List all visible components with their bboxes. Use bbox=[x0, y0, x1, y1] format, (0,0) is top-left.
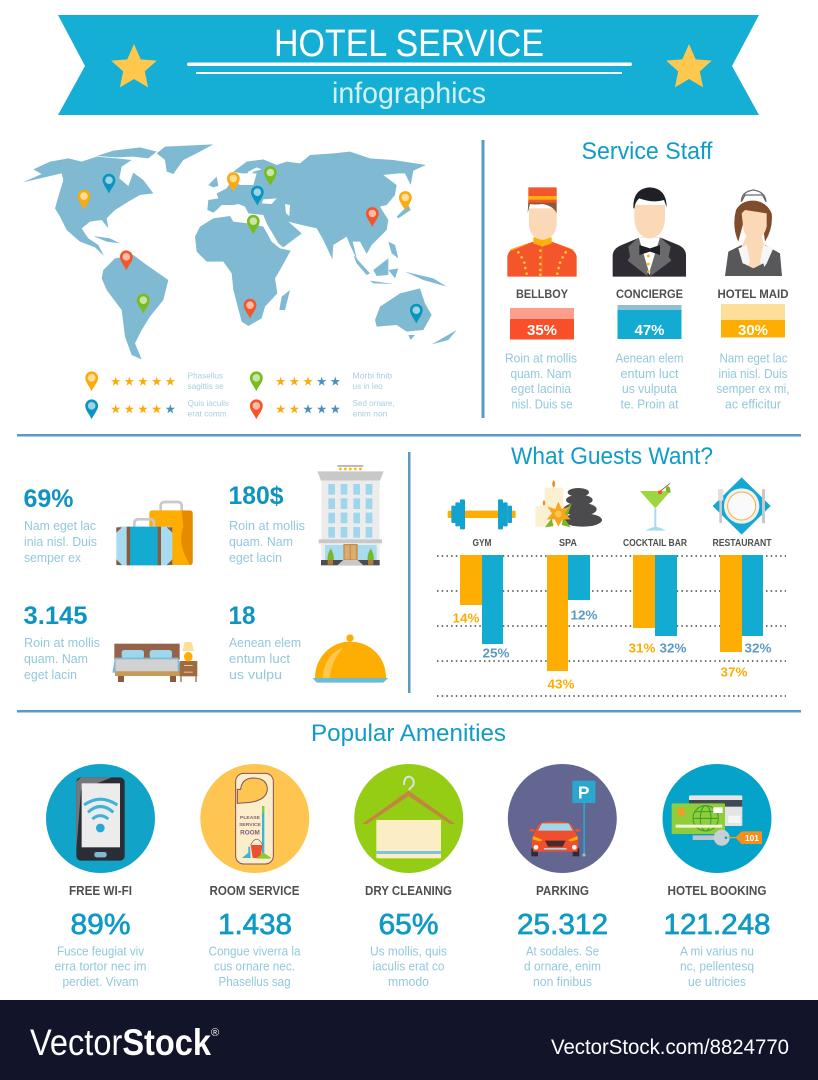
amenity: wifi labels: Fusce feugiat viv bbox=[57, 944, 145, 958]
bar chart: 43% bbox=[548, 678, 574, 692]
amenity: wifi labels: erra tortor nec im bbox=[54, 960, 146, 974]
icon: bellboy bbox=[507, 187, 577, 277]
footer bar bbox=[0, 1000, 818, 1080]
stat: 3.145: 3.145 bbox=[24, 602, 88, 630]
icon: cloche bbox=[313, 634, 388, 683]
amenity: wifi labels bbox=[54, 884, 146, 989]
stat: 69%: inia nisl. Duis bbox=[24, 535, 97, 549]
icon: cocktail bbox=[640, 483, 671, 531]
map legend: erat comm bbox=[188, 409, 227, 419]
icon: parking: P bbox=[578, 782, 589, 802]
icon: hotel building bbox=[317, 465, 384, 565]
stat: 180$: Roin at mollis bbox=[229, 519, 305, 533]
map legend: Sed ornare, bbox=[353, 398, 395, 408]
stat: 180$: quam. Nam bbox=[229, 535, 293, 549]
heading: What Guests Want?: What Guests Want? bbox=[511, 443, 713, 470]
bar: maid 30% bbox=[721, 304, 785, 339]
panel: what guests want bbox=[437, 443, 786, 696]
stat: 3.145: eget lacin bbox=[24, 668, 77, 682]
amenity: dry cleaning labels: Us mollis, quis bbox=[370, 944, 447, 958]
icon: door hanger bbox=[200, 764, 309, 873]
amenity: dry cleaning labels: iaculis erat co bbox=[372, 960, 445, 974]
label: gym: GYM bbox=[472, 538, 492, 549]
icon: dumbbell bbox=[448, 499, 516, 529]
stat: 18: entum luct bbox=[229, 652, 291, 666]
icon: parking bbox=[508, 764, 617, 873]
staff: maid label: HOTEL MAID bbox=[718, 289, 788, 301]
icon: suitcases bbox=[116, 502, 193, 565]
bar chart: 32% bbox=[744, 642, 772, 656]
stat: 3.145: quam. Nam bbox=[24, 652, 88, 666]
amenity: room service labels: cus ornare nec. bbox=[214, 960, 295, 974]
icon: door hanger: PLEASE bbox=[240, 815, 261, 821]
label: cocktail bar: COCKTAIL BAR bbox=[623, 538, 688, 549]
panel: popular amenities bbox=[46, 720, 772, 989]
text: bellboy: quam. Nam bbox=[510, 367, 572, 381]
amenity: room service labels: Phasellus sag bbox=[218, 975, 291, 989]
map legend: enim non bbox=[353, 409, 388, 419]
footer url: VectorStock.com/8824770 bbox=[551, 1036, 789, 1059]
icon: door hanger: ROOM bbox=[240, 830, 260, 837]
text: concierge: Aenean elem bbox=[616, 352, 684, 366]
amenity: hotel booking labels: nc, pellentesq bbox=[680, 960, 754, 974]
text: bellboy: Roin at mollis bbox=[505, 352, 577, 366]
amenity: room service labels: Congue viverra la bbox=[208, 944, 301, 958]
icon: door hanger: SERVICE bbox=[239, 822, 262, 828]
bar chart: 31% bbox=[628, 642, 656, 656]
text: maid: semper ex mi, bbox=[716, 382, 790, 396]
map legend: Morbi finib bbox=[353, 370, 392, 380]
text: bellboy: nisl. Duis se bbox=[512, 398, 573, 412]
text: maid: Nam eget lac bbox=[720, 352, 788, 366]
map legend: Quis iaculis bbox=[188, 398, 229, 408]
amenity: parking labels: d ornare, enim bbox=[524, 960, 601, 974]
icon: booking cards and key: 101 bbox=[745, 833, 759, 843]
label: spa: SPA bbox=[559, 538, 577, 549]
icon: restaurant plate bbox=[713, 477, 771, 535]
map legend bbox=[85, 370, 395, 419]
world map continents bbox=[23, 144, 457, 359]
text: bellboy: eget lacinia bbox=[511, 382, 571, 396]
title banner bbox=[58, 15, 759, 115]
icon: bed bbox=[112, 642, 197, 682]
amenity: parking labels: PARKING bbox=[536, 884, 589, 898]
amenity: hotel booking labels: A mi varius nu bbox=[680, 944, 754, 958]
stat: 69%: Nam eget lac bbox=[24, 519, 96, 533]
map legend: Phasellus bbox=[188, 370, 223, 380]
amenity: dry cleaning labels bbox=[365, 884, 452, 989]
subtitle: infographics bbox=[332, 77, 486, 110]
bar: bellboy 35% bbox=[510, 308, 574, 340]
map legend: sagittis se bbox=[188, 381, 224, 391]
amenity: parking labels: non finibus bbox=[533, 975, 592, 989]
icon: hotel maid bbox=[725, 190, 782, 276]
heading: Service Staff: Service Staff bbox=[582, 138, 713, 165]
panel: world map bbox=[23, 144, 457, 419]
bar chart bbox=[437, 555, 786, 696]
amenity: room service labels: 1.438 bbox=[218, 909, 292, 941]
bar: maid 30%: 30% bbox=[738, 322, 768, 339]
amenity: dry cleaning labels: DRY CLEANING bbox=[365, 884, 452, 898]
stat: 69%: 69% bbox=[24, 485, 74, 513]
amenity: wifi labels: 89% bbox=[70, 909, 130, 941]
icon: wifi phone bbox=[46, 764, 155, 873]
amenity: wifi labels: perdiet. Vivam bbox=[62, 975, 138, 989]
text: maid: inia nisl. Duis bbox=[718, 367, 788, 381]
text: concierge: us vulputa bbox=[622, 382, 677, 396]
amenity: hotel booking labels: ue ultricies bbox=[688, 975, 746, 989]
stat: 180$ bbox=[228, 482, 305, 565]
amenity: parking labels: At sodales. Se bbox=[526, 944, 599, 958]
amenity: dry cleaning labels: mmodo bbox=[388, 975, 429, 989]
bar chart: 14% bbox=[452, 612, 480, 626]
text: maid: ac efficitur bbox=[725, 398, 781, 412]
stat: 69%: semper ex bbox=[24, 551, 82, 565]
icon: towel on hanger bbox=[354, 764, 463, 873]
footer logo: VectorStock bbox=[30, 1022, 211, 1063]
stat: 18: 18 bbox=[228, 602, 256, 630]
amenity: dry cleaning labels: 65% bbox=[378, 909, 438, 941]
text: concierge: te. Proin at bbox=[620, 398, 679, 412]
amenity: parking labels bbox=[517, 884, 608, 989]
amenity: hotel booking labels bbox=[664, 884, 770, 989]
amenity: parking labels: 25.312 bbox=[517, 909, 608, 941]
stat: 18: us vulpu bbox=[229, 668, 282, 682]
icon: right star bbox=[666, 44, 712, 87]
amenity: room service labels: ROOM SERVICE bbox=[210, 884, 300, 898]
text: bellboy bbox=[505, 352, 577, 412]
bar: concierge 47%: 47% bbox=[634, 322, 665, 339]
stat: 3.145 bbox=[24, 602, 100, 682]
heading: Popular Amenities: Popular Amenities bbox=[311, 720, 506, 747]
text: concierge bbox=[616, 352, 684, 412]
amenity: room service labels bbox=[208, 884, 301, 989]
bar: concierge 47% bbox=[618, 305, 682, 339]
icon: spa candles and stones bbox=[535, 480, 602, 527]
icon: left star bbox=[111, 44, 157, 87]
stat: 18 bbox=[228, 602, 301, 682]
bar chart: 25% bbox=[482, 646, 510, 660]
amenity: wifi labels: FREE WI-FI bbox=[69, 884, 132, 898]
staff: bellboy label: BELLBOY bbox=[516, 289, 568, 301]
panel: service staff bbox=[505, 138, 790, 412]
text: concierge: entum luct bbox=[620, 367, 679, 381]
amenity: hotel booking labels: HOTEL BOOKING bbox=[668, 884, 766, 898]
stat: 3.145: Roin at mollis bbox=[24, 636, 100, 650]
title: HOTEL SERVICE bbox=[274, 23, 544, 65]
map pins bbox=[78, 166, 423, 324]
bar chart: 32% bbox=[660, 642, 686, 656]
stat: 69% bbox=[24, 485, 97, 565]
icon: concierge bbox=[613, 187, 686, 277]
text: maid bbox=[716, 352, 790, 412]
label: restaurant: RESTAURANT bbox=[712, 538, 772, 549]
amenity: hotel booking labels: 121.248 bbox=[664, 909, 770, 941]
stat: 180$: 180$ bbox=[228, 482, 284, 510]
inland seas bbox=[243, 167, 290, 216]
registered mark: ® bbox=[211, 1027, 219, 1039]
icon: booking cards and key bbox=[662, 764, 772, 873]
bar chart: 12% bbox=[570, 608, 598, 622]
staff: concierge label: CONCIERGE bbox=[616, 289, 683, 301]
stat: 18: Aenean elem bbox=[229, 636, 301, 650]
stat: 180$: eget lacin bbox=[229, 551, 282, 565]
panel: hotel stats bbox=[24, 465, 388, 683]
map legend: us in leo bbox=[353, 381, 383, 391]
bar chart: 37% bbox=[720, 666, 748, 680]
bar: bellboy 35%: 35% bbox=[527, 322, 557, 339]
